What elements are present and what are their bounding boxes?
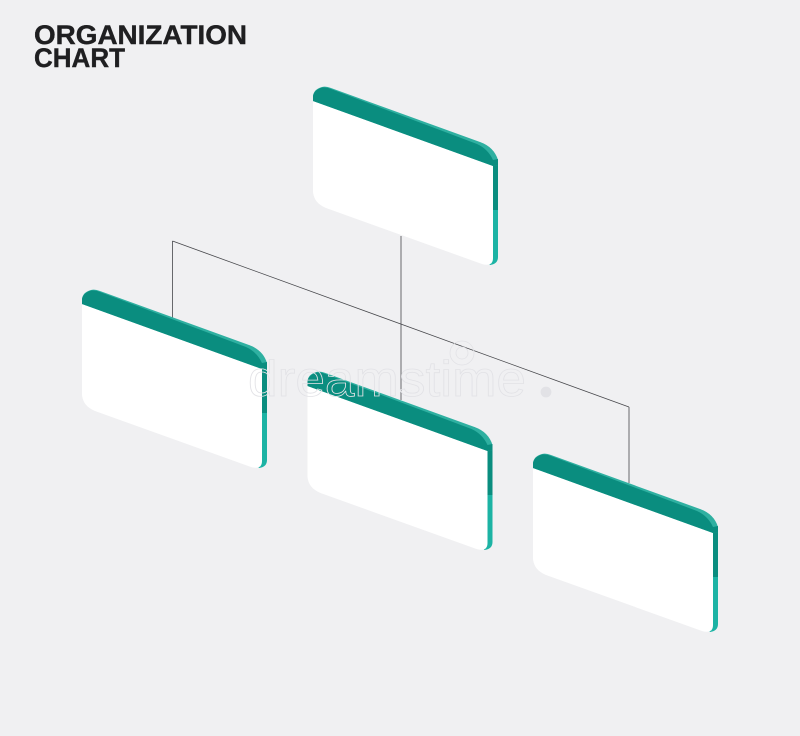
- card: top level: [313, 87, 498, 265]
- card: second level left: [82, 290, 267, 468]
- title: [34, 20, 247, 73]
- card: second level middle: [308, 372, 492, 550]
- connector lines: [172, 236, 629, 483]
- watermark: dreamstime: [248, 351, 526, 407]
- card: second level right: [533, 454, 718, 632]
- title: ORGANIZATION: [34, 20, 247, 50]
- title: CHART: [34, 43, 125, 73]
